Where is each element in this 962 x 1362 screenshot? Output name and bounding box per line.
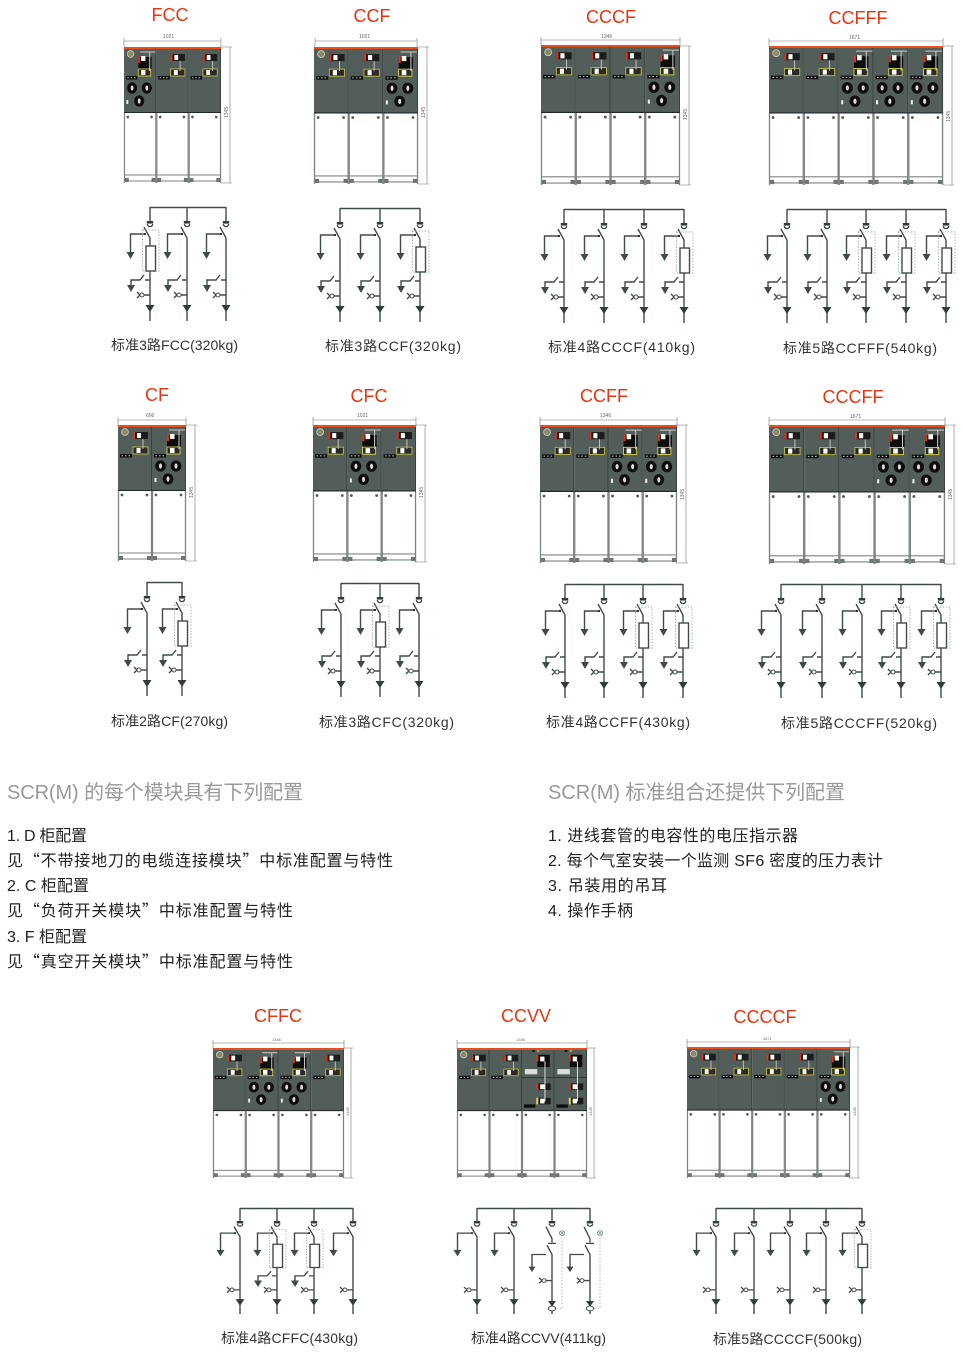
single-line diagram: CF <box>124 582 191 696</box>
list: module configuration items: 1. D 柜配置 <box>7 827 87 845</box>
heading: CCCFF: CCCFF <box>822 387 884 407</box>
cabinet elevation: FCC: 1345 <box>224 107 230 118</box>
panel: CCCCF configuration <box>687 1007 871 1347</box>
caption: CF: 标准2路CF(270kg) <box>111 713 228 729</box>
single-line diagram: CFFC <box>216 1208 358 1314</box>
text block: standard assembly options <box>548 781 883 920</box>
caption: CCCFF: 标准5路CCCFF(520kg) <box>781 715 937 731</box>
cabinet elevation: CCVV: 1345 <box>588 1106 593 1116</box>
cabinet elevation: CFFC: 1346 <box>272 1037 282 1042</box>
cabinet elevation: CCCFF: 1345 <box>948 489 954 500</box>
cabinet elevation: CFC: 1021 <box>357 413 368 419</box>
cabinet elevation: CCFF: 1345 <box>680 489 686 500</box>
caption: CFFC: 标准4路CFFC(430kg) <box>221 1330 358 1346</box>
cabinet elevation: CCCCF: 1345 <box>852 1106 857 1116</box>
caption: FCC: 标准3路FCC(320kg) <box>111 337 238 353</box>
cabinet elevation: FCC: 1021 <box>163 34 174 40</box>
cabinet elevation: CCF: 1021 <box>359 34 370 40</box>
cabinet elevation: CCVV: 1346 <box>516 1037 526 1042</box>
cabinet elevation: CFFC <box>213 1037 353 1178</box>
cabinet elevation: CCCF: 1345 <box>683 109 689 120</box>
cabinet elevation: CCCF <box>541 34 691 185</box>
heading: CCCF: CCCF <box>586 7 636 27</box>
caption: CCCCF: 标准5路CCCCF(500kg) <box>713 1331 862 1347</box>
cabinet elevation: CCF: 1345 <box>421 107 427 118</box>
cabinet elevation: CCCFF <box>769 414 956 564</box>
panel: CCFF configuration <box>540 386 692 730</box>
single-line diagram: CFC <box>318 583 424 697</box>
cabinet elevation: CCCCF <box>687 1036 860 1178</box>
cabinet elevation: FCC <box>124 34 232 183</box>
list: standard assembly items: 1. 进线套管的电容性的电压指示器 <box>548 827 798 845</box>
caption: CCCF: 标准4路CCCF(410kg) <box>548 339 695 355</box>
single-line diagram: CCCFF <box>758 584 950 698</box>
single-line diagram: FCC <box>126 207 230 321</box>
single-line diagram: CCVV <box>454 1208 603 1314</box>
list: standard assembly items: 4. 操作手柄 <box>548 902 633 920</box>
cabinet elevation: CCCFF: 1671 <box>850 414 861 420</box>
cabinet elevation: CFFC: 1345 <box>345 1106 350 1116</box>
cabinet elevation: CCF <box>314 34 429 184</box>
cabinet elevation: CCFFF <box>769 35 954 185</box>
heading: module configuration: SCR(M) 的每个模块具有下列配置 <box>7 781 303 804</box>
cabinet elevation: CF: 1345 <box>189 487 195 498</box>
list: module configuration items: 见“不带接地刀的电缆连接模块”中标准配置与特性 <box>7 847 393 871</box>
panel: CCF configuration <box>314 6 461 354</box>
single-line diagram: CCF <box>316 208 429 322</box>
heading: FCC: FCC <box>152 5 188 25</box>
cabinet elevation: CCCCF: 1671 <box>763 1036 773 1041</box>
panel: FCC configuration <box>111 5 238 353</box>
caption: CCF: 标准3路CCF(320kg) <box>325 338 461 354</box>
panel: CCFFF configuration <box>764 8 955 356</box>
heading: CCVV: CCVV <box>501 1006 551 1026</box>
cabinet elevation: CCVV <box>457 1037 596 1178</box>
cabinet elevation: CCFF <box>540 413 688 563</box>
list: module configuration items <box>7 827 393 972</box>
heading: CFC: CFC <box>350 386 388 406</box>
panel: CFFC configuration <box>213 1006 358 1346</box>
list: module configuration items: 见“真空开关模块”中标准配置与特性 <box>7 948 293 972</box>
single-line diagram: CCFFF <box>764 209 955 323</box>
panel: CF configuration <box>111 385 228 729</box>
list: standard assembly items: 3. 吊装用的吊耳 <box>548 877 667 895</box>
cabinet elevation: CCFF: 1346 <box>600 413 611 419</box>
cabinet elevation: CFC: 1345 <box>419 487 425 498</box>
single-line diagram: CCCF <box>540 209 693 323</box>
heading: standard assembly options: SCR(M) 标准组合还提供下列配置 <box>548 781 845 804</box>
heading: CCCCF: CCCCF <box>734 1007 796 1027</box>
list: module configuration items: 见“负荷开关模块”中标准配置与特性 <box>7 897 293 921</box>
single-line diagram: CCCCF <box>692 1208 871 1314</box>
heading: CF: CF <box>145 385 169 405</box>
heading: CCFFF: CCFFF <box>829 8 887 28</box>
panel: CFC configuration <box>313 386 454 730</box>
heading: CFFC: CFFC <box>254 1006 302 1026</box>
cabinet elevation: CCFFF: 1671 <box>849 35 860 41</box>
text block: module configuration <box>7 781 393 972</box>
list: standard assembly items <box>548 827 883 920</box>
list: module configuration items: 3. F 柜配置 <box>7 928 87 946</box>
list: standard assembly items: 2. 每个气室安装一个监测 SF6 密度的压力表计 <box>548 852 883 870</box>
cabinet elevation: CCCF: 1346 <box>601 34 612 40</box>
single-line diagram: CCFF <box>542 584 692 698</box>
cabinet elevation: CF: 696 <box>146 413 155 419</box>
heading: CCFF: CCFF <box>580 386 628 406</box>
caption: CCFFF: 标准5路CCFFF(540kg) <box>783 340 937 356</box>
list: module configuration items: 2. C 柜配置 <box>7 877 89 895</box>
panel: CCCF configuration <box>540 7 695 355</box>
cabinet elevation: CFC <box>313 413 427 562</box>
panel: CCCFF configuration <box>758 387 956 731</box>
cabinet elevation: CCFFF: 1345 <box>946 111 952 122</box>
cabinet elevation: CF <box>118 413 197 561</box>
caption: CCFF: 标准4路CCFF(430kg) <box>546 714 690 730</box>
panel: CCVV configuration <box>454 1006 606 1346</box>
heading: CCF: CCF <box>354 6 390 26</box>
caption: CCVV: 标准4路CCVV(411kg) <box>471 1330 606 1346</box>
caption: CFC: 标准3路CFC(320kg) <box>319 714 454 730</box>
